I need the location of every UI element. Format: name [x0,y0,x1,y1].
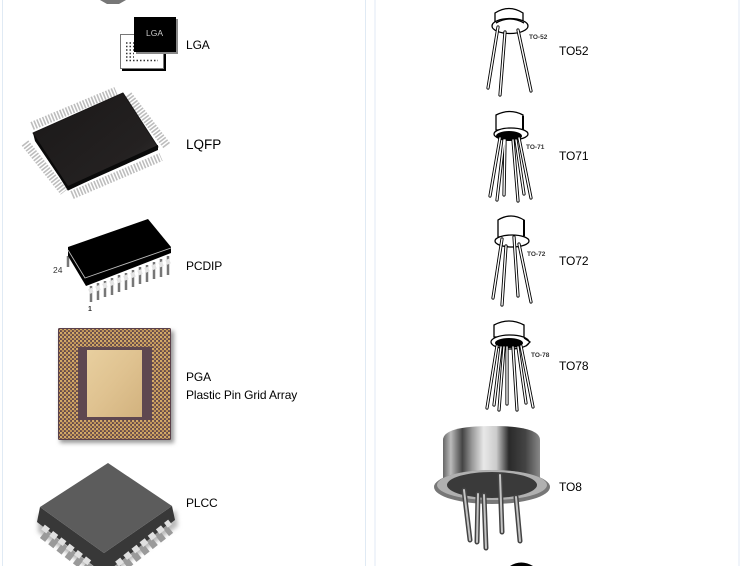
label: TO78: TO78 [559,359,589,373]
icon: TO-78 can: TO-78 [531,352,550,359]
icon: cropped chip above LGA [100,0,126,4]
icon: TO-8 metal can [434,426,550,548]
label: TO52: TO52 [559,44,589,58]
label: TO72: TO72 [559,254,589,268]
icon: PCDIP package: 1 [88,306,92,313]
label: PCDIP: PCDIP [186,259,222,273]
label: LGA: LGA [186,38,210,52]
label: TO8: TO8 [559,480,582,494]
panel: right column [375,0,739,566]
icon: PCDIP package: 24 [53,265,63,275]
label: LQFP: LQFP [186,137,221,152]
icon: TO-52 can [488,8,548,95]
icon: TO-72 can [493,216,546,305]
icon: TO-52 can: TO-52 [529,34,548,41]
icon: TO-71 can: TO-71 [526,144,545,151]
label: Plastic Pin Grid Array: Plastic Pin Grid Array [186,388,297,402]
icon: LQFP package [25,91,167,195]
icon: LGA package [120,17,178,71]
label: TO71: TO71 [559,149,589,163]
label: PGA: PGA [186,370,211,384]
icon: TO-71 can [490,112,545,201]
icon: LGA package: LGA [146,28,163,38]
icon: PLCC package [37,463,178,566]
icon: TO-78 can [487,321,550,410]
label: PLCC: PLCC [186,496,218,510]
icon: PCDIP package [53,219,171,313]
icon: cropped can below TO-8 [510,562,533,566]
icon: PGA package [58,328,174,443]
icon: TO-72 can: TO-72 [527,251,546,258]
panel: left column [2,0,366,566]
